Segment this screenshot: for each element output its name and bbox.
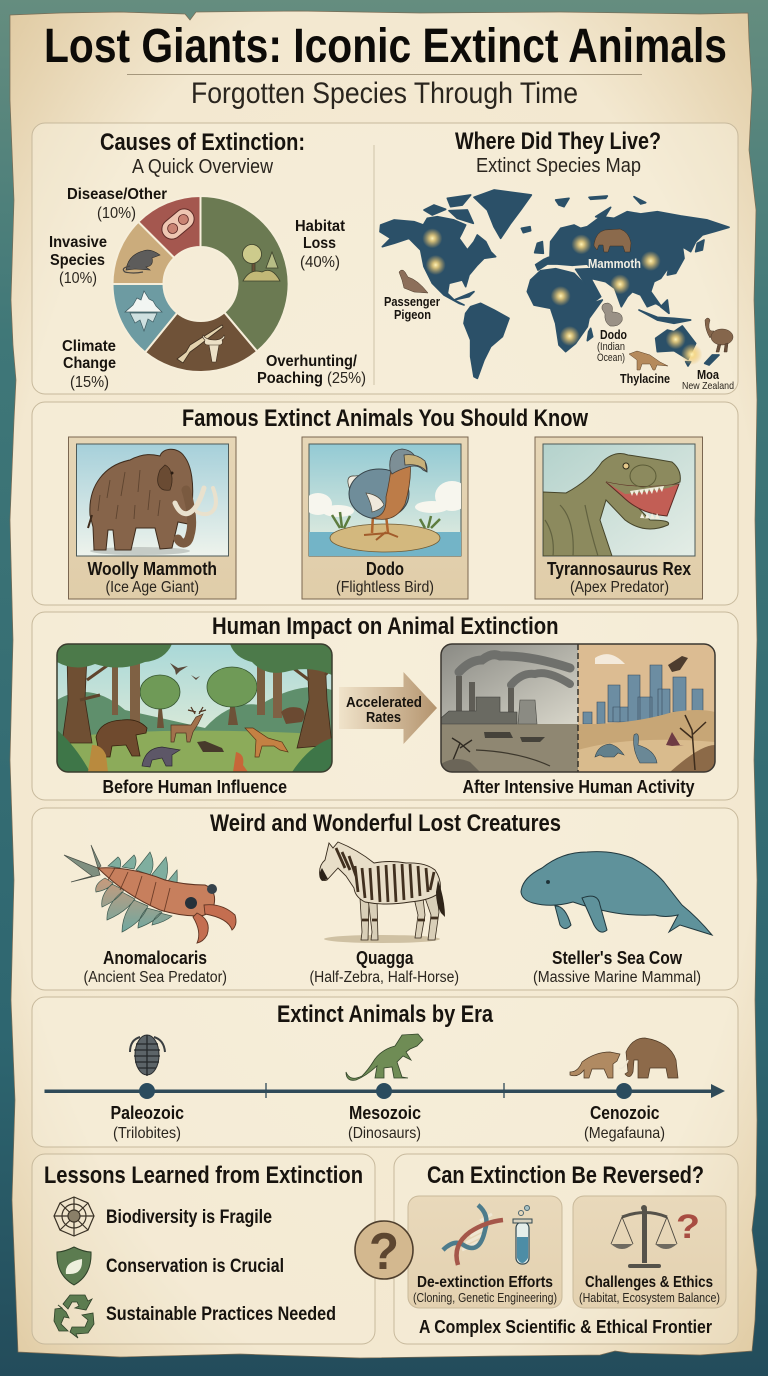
label: Dodo [366, 559, 404, 579]
label: dodo: Dodo [600, 327, 627, 342]
illustration: mammoth [88, 449, 216, 555]
label: invasive species: (10%) [59, 270, 97, 287]
panel: causes and map [32, 123, 738, 394]
caption: after: After Intensive Human Activity [462, 777, 694, 797]
illustration: quagga [320, 842, 445, 943]
sublabel: (Cloning, Genetic Engineering) [413, 1291, 557, 1305]
closing line: A Complex Scientific & Ethical Frontier [419, 1317, 712, 1337]
heading: causes of extinction [100, 129, 305, 178]
icon: dna [443, 1205, 503, 1265]
arrow: accelerated rates: Accelerated [346, 694, 422, 711]
label: cenozoic: (Megafauna) [584, 1125, 665, 1142]
arrow: accelerated rates: Rates [366, 709, 401, 726]
label: overhunting: Overhunting/ [266, 353, 357, 370]
label: habitat loss: (40%) [300, 254, 340, 271]
label: overhunting [257, 353, 366, 387]
card: t-rex [535, 437, 702, 599]
label: quagga: Quagga [356, 948, 414, 968]
icon: test tube [513, 1206, 532, 1264]
label: paleozoic: (Trilobites) [113, 1125, 181, 1142]
heading: map [455, 128, 661, 177]
panel: lessons learned [32, 1154, 375, 1344]
label: dodo: Ocean) [597, 352, 625, 364]
label: cenozoic: Cenozoic [590, 1103, 660, 1123]
text: conservation: Conservation is Crucial [106, 1256, 284, 1277]
panel: can extinction be reversed [394, 1154, 738, 1344]
label: climate change: Change [63, 355, 116, 372]
label: disease: Disease/Other [67, 186, 167, 203]
heading: map: Extinct Species Map [476, 155, 641, 177]
label: mesozoic: Mesozoic [349, 1103, 421, 1123]
label: dodo [597, 327, 627, 364]
label: quagga [310, 948, 459, 986]
illustration: t-rex [543, 454, 680, 556]
heading: Can Extinction Be Reversed? [427, 1162, 704, 1189]
illustration: industrial after [441, 644, 715, 772]
label: steller's sea cow: Steller's Sea Cow [552, 948, 683, 968]
panel: weird and wonderful [32, 808, 738, 990]
icon: map mammoth [594, 229, 631, 252]
donut chart [112, 196, 289, 372]
heading: Weird and Wonderful Lost Creatures [210, 810, 561, 837]
icon: forest [242, 244, 280, 281]
label: habitat loss [295, 218, 346, 271]
label: mesozoic: (Dinosaurs) [348, 1125, 421, 1142]
icon: rifle and skull [177, 325, 225, 363]
label: Tyrannosaurus Rex [547, 559, 691, 579]
illustration: forest before [57, 644, 332, 772]
icon: map thylacine [629, 351, 668, 370]
label: dodo: (Indian [597, 341, 625, 353]
label: climate change: (15%) [70, 374, 109, 391]
heading: Lessons Learned from Extinction [44, 1162, 363, 1189]
heading: Extinct Animals by Era [277, 1001, 494, 1028]
illustration: anomalocaris [64, 845, 236, 943]
label: Woolly Mammoth [88, 559, 217, 579]
label: Challenges & Ethics [585, 1274, 713, 1291]
label: quagga: (Half-Zebra, Half-Horse) [310, 969, 459, 986]
label: steller's sea cow: (Massive Marine Mammal) [533, 969, 701, 986]
icon: bacterium [158, 205, 198, 243]
icon: conservation shield [57, 1247, 91, 1285]
panel: famous extinct animals [32, 402, 738, 605]
text: sustainable: Sustainable Practices Needed [106, 1304, 336, 1325]
icon: trilobite [130, 1035, 165, 1076]
label: paleozoic [110, 1103, 184, 1142]
label: passenger pigeon: Passenger [384, 294, 440, 309]
label: disease [67, 186, 167, 222]
subtitle: Forgotten Species Through Time [191, 77, 578, 110]
label: moa: Moa [697, 367, 720, 382]
icon: biodiversity web [54, 1197, 94, 1236]
icon: recycle [54, 1295, 94, 1338]
heading: map: Where Did They Live? [455, 128, 661, 155]
world map [380, 190, 729, 378]
label: anomalocaris: Anomalocaris [103, 948, 207, 968]
panel: extinct animals by era [32, 997, 738, 1147]
icon: map dodo [602, 303, 622, 326]
icon: megafauna [570, 1038, 678, 1078]
illustration: dodo [304, 449, 469, 556]
sublabel: (Apex Predator) [570, 579, 669, 596]
label: anomalocaris: (Ancient Sea Predator) [84, 969, 227, 986]
label: cenozoic [584, 1103, 665, 1142]
title rule [127, 74, 642, 75]
sublabel: (Ice Age Giant) [106, 579, 199, 596]
label: moa [682, 367, 734, 392]
label: moa: New Zealand [682, 380, 734, 392]
label: disease: (10%) [97, 205, 136, 222]
panel: human impact [32, 612, 738, 800]
map glows [422, 228, 702, 365]
label: mesozoic [348, 1103, 421, 1142]
label: invasive species: Species [50, 252, 105, 269]
text: biodiversity: Biodiversity is Fragile [106, 1207, 272, 1228]
caption: before: Before Human Influence [102, 777, 287, 797]
illustration: steller's sea cow [521, 852, 712, 935]
label: invasive species [49, 234, 107, 287]
label: overhunting: (25%) [327, 370, 366, 387]
label: overhunting: Poaching [257, 370, 323, 387]
card: dodo [302, 437, 469, 599]
arrow: accelerated rates [339, 672, 437, 744]
label: climate change: Climate [62, 338, 116, 355]
heading: Human Impact on Animal Extinction [212, 613, 558, 640]
label: invasive species: Invasive [49, 234, 107, 251]
label: De-extinction Efforts [417, 1274, 553, 1291]
label: thylacine: Thylacine [620, 371, 670, 386]
icon: dinosaur [346, 1034, 423, 1080]
icon: passenger pigeon [399, 270, 428, 293]
icon: question mark badge [355, 1221, 413, 1281]
label: climate change [62, 338, 116, 391]
heading: causes of extinction: A Quick Overview [132, 156, 273, 178]
icon: red question mark: ? [676, 1208, 700, 1246]
heading: causes of extinction: Causes of Extinction: [100, 129, 305, 156]
card: de-extinction [408, 1196, 562, 1308]
icon: rat [123, 250, 160, 273]
sublabel: (Flightless Bird) [336, 579, 434, 596]
label: anomalocaris [84, 948, 227, 986]
heading: Famous Extinct Animals You Should Know [182, 405, 588, 432]
label: paleozoic: Paleozoic [110, 1103, 184, 1123]
label: mammoth: Mammoth [588, 256, 641, 271]
icon: question mark badge: ? [369, 1223, 399, 1281]
icon: moa [705, 318, 733, 352]
label: habitat loss: Habitat [295, 218, 346, 235]
icon: scales [611, 1205, 677, 1268]
label: steller's sea cow [533, 948, 701, 986]
sublabel: (Habitat, Ecosystem Balance) [579, 1291, 720, 1305]
card: woolly mammoth [68, 437, 236, 599]
timeline [44, 1083, 725, 1099]
label: passenger pigeon [384, 294, 440, 322]
icon: iceberg [125, 291, 162, 331]
label: habitat loss: Loss [303, 235, 336, 252]
label: passenger pigeon: Pigeon [394, 307, 431, 322]
card: challenges [573, 1196, 726, 1308]
